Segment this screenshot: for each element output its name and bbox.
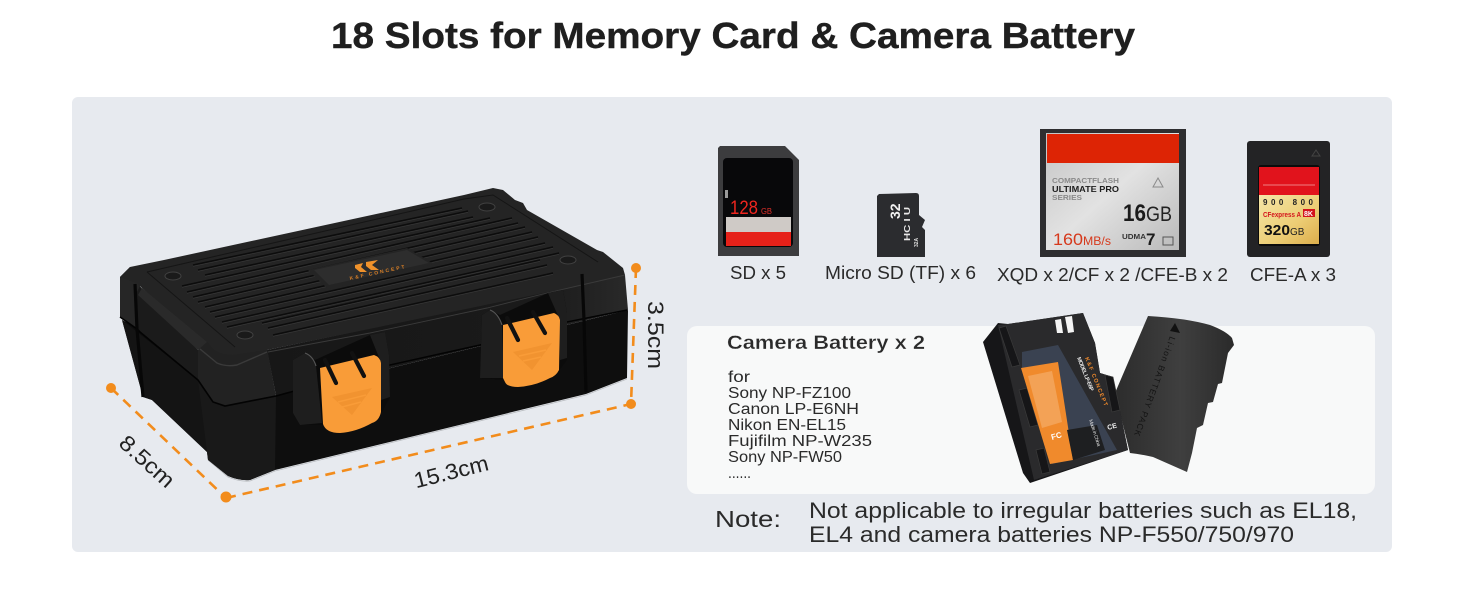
side ribs (999, 326, 1120, 474)
contacts (1055, 316, 1074, 333)
card: CF: 16 (1123, 200, 1146, 227)
lower corner block (198, 380, 276, 480)
battery front (983, 313, 1128, 483)
title: 18 Slots for Memory Card & Camera Battery (331, 15, 1135, 56)
label: SD: SD x 5 (730, 263, 786, 283)
top grooves (182, 208, 559, 335)
dimension: length 15.3cm (220, 404, 631, 502)
card: SD: 128 (730, 198, 758, 219)
logo patch: K&F CONCEPT (349, 264, 405, 282)
compatible batteries list: Nikon EN-EL15 (728, 417, 846, 434)
lid left side (120, 277, 198, 380)
groove highlights (182, 209, 559, 336)
note label: Note: (715, 506, 781, 532)
lid seam (120, 310, 627, 406)
right latch (480, 290, 567, 387)
lid front band (267, 275, 628, 396)
dimension: depth 8.5cm (106, 383, 226, 498)
notch (1067, 425, 1105, 460)
latch housing (480, 290, 567, 380)
panel: camera battery (687, 313, 1375, 494)
battery back cover: Li-ion BATTERY PACK (1132, 335, 1178, 438)
card: CF: UDMA (1122, 234, 1146, 241)
note text (809, 498, 1357, 547)
card: CF: 7 (1146, 230, 1155, 249)
card: CFE-A (1247, 141, 1330, 257)
screws (165, 203, 576, 339)
compatible batteries list: Fujifilm NP-W235 (728, 433, 872, 450)
note text: Not applicable to irregular batteries such as EL18, (809, 498, 1357, 523)
left latch (293, 332, 390, 433)
orange clip (320, 355, 381, 433)
logo patch (308, 248, 434, 289)
battery front: Made in China (1087, 419, 1102, 447)
battery back cover (1115, 316, 1234, 472)
label: Micro SD: Micro SD (TF) x 6 (825, 263, 976, 283)
card: CF: MB/s (1083, 234, 1111, 248)
label: CF: XQD x 2/CF x 2 /CFE-B x 2 (997, 265, 1228, 285)
panel: product background (72, 97, 1392, 552)
note text: EL4 and camera batteries NP-F550/750/970 (809, 522, 1294, 547)
card: CF: SERIES (1052, 195, 1082, 202)
card: CF (1040, 129, 1186, 257)
card: CF: ULTIMATE PRO (1052, 184, 1119, 194)
dimension: length 15.3cm: 15.3cm (411, 450, 491, 493)
orange sticker (1021, 362, 1073, 464)
battery front: MODEL LP-E6P (1075, 357, 1094, 392)
dimension: height 3.5cm: 3.5cm (643, 301, 668, 369)
lower left side (122, 320, 213, 452)
card: CFE-A: 320 (1264, 222, 1290, 239)
case silhouette and lower front (122, 310, 628, 480)
compatible batteries list (728, 369, 872, 482)
compatible batteries list: for (728, 369, 750, 386)
card: CFE-A: 8K (1304, 211, 1313, 218)
card: Micro SD: HC I U (903, 207, 912, 241)
compatible batteries list: Sony NP-FW50 (728, 449, 842, 466)
lid corner block (198, 342, 276, 406)
card: CF: 160 (1053, 230, 1083, 249)
compatible batteries list: ...... (728, 465, 751, 482)
dimension: depth 8.5cm: 8.5cm (114, 430, 180, 493)
battery front: K&F CONCEPT (1083, 357, 1108, 408)
product: storage case (120, 188, 628, 481)
compatible batteries list: Sony NP-FZ100 (728, 385, 851, 402)
lid top (120, 188, 625, 355)
dimension: height 3.5cm (626, 263, 668, 409)
latch housing (293, 332, 390, 425)
card: CF: GB (1146, 203, 1172, 226)
card: CFE-A: CFexpress A (1263, 210, 1301, 219)
battery front: CE (1107, 422, 1118, 432)
orange clip (503, 313, 560, 387)
label (1022, 345, 1117, 464)
card: Micro SD: 32A (914, 237, 920, 247)
label: CFE-A: CFE-A x 3 (1250, 265, 1336, 285)
card: CFE-A: GB (1290, 227, 1305, 238)
battery front: FC (1050, 430, 1063, 442)
card: SD: GB (761, 207, 772, 216)
card: Micro SD: 32 (887, 203, 903, 219)
card: CFE-A: 900 800 (1263, 198, 1314, 207)
straps (135, 274, 586, 397)
battery heading: Camera Battery x 2 (727, 333, 925, 354)
card: Micro SD (877, 193, 925, 257)
card: CF: COMPACTFLASH (1052, 176, 1119, 185)
compatible batteries list: Canon LP-E6NH (728, 401, 859, 418)
card: SD (718, 146, 799, 256)
